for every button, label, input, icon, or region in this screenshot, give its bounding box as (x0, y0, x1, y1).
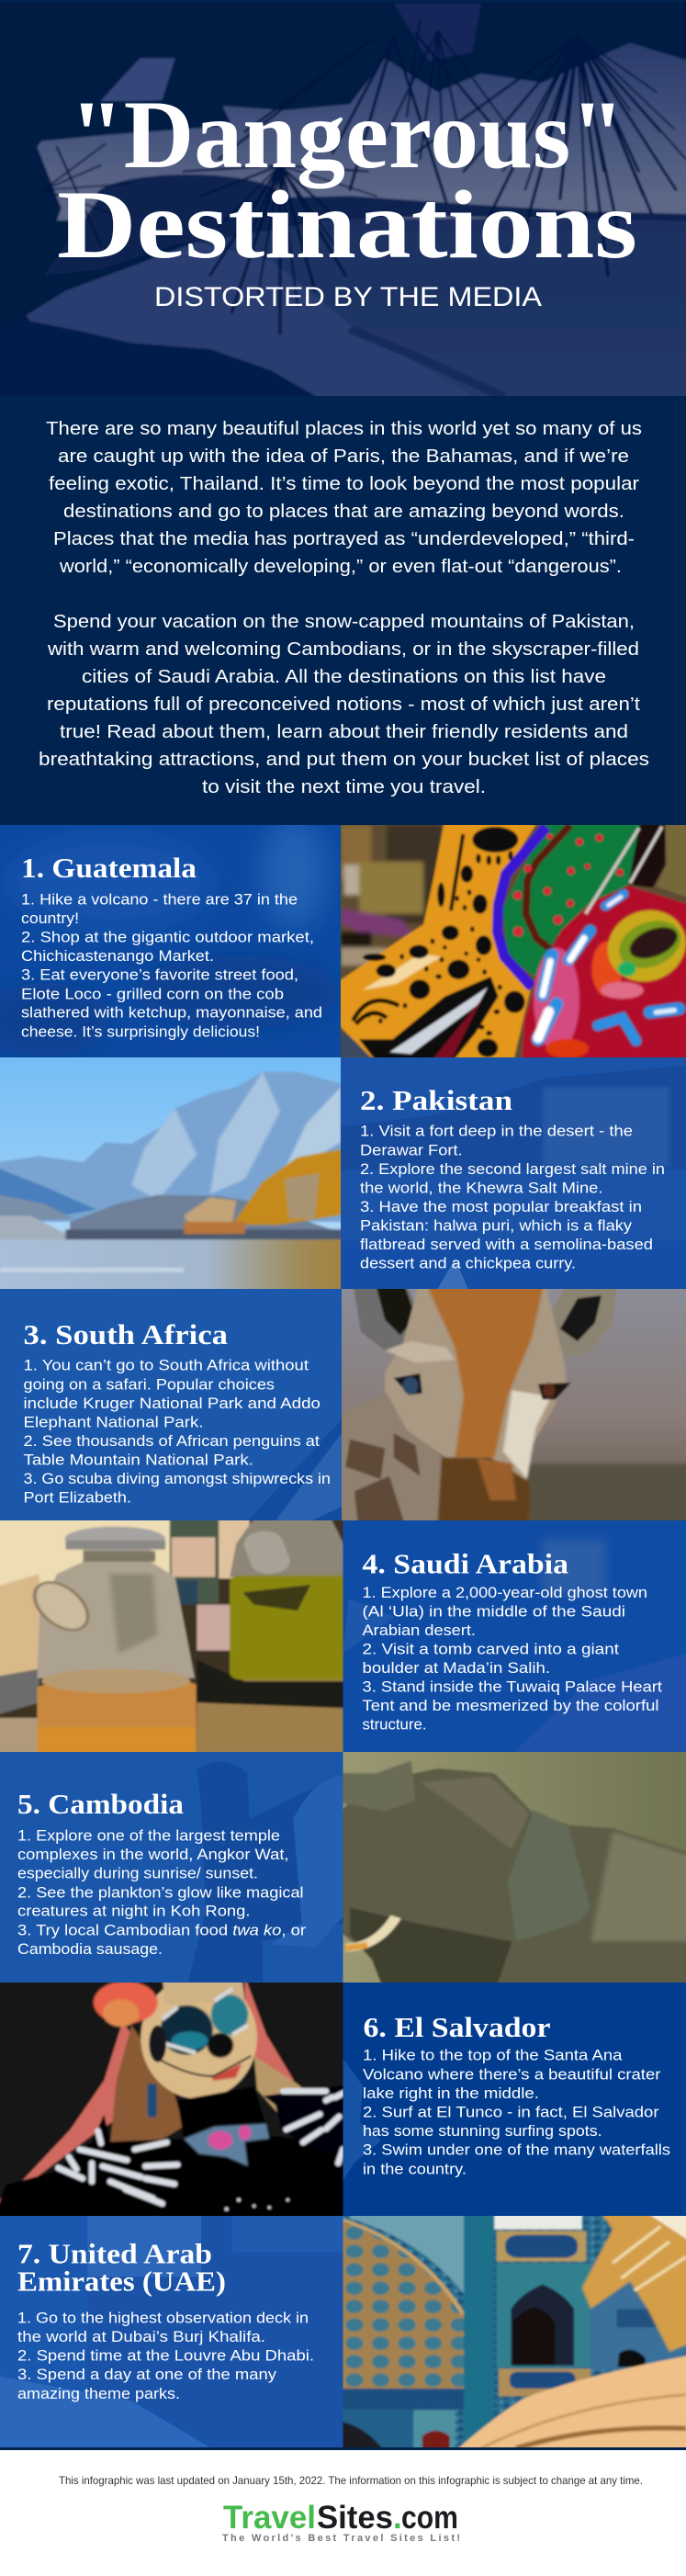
list of activities: 1. Explore a 2,000-year-old ghost town (362, 1584, 647, 1601)
list of activities: 3. Go scuba diving amongst shipwrecks in (24, 1470, 331, 1487)
list of activities: slathered with ketchup, mayonnaise, and (21, 1004, 322, 1022)
panel: introduction (0, 396, 686, 825)
logo: TravelSites.com: com (401, 2500, 458, 2536)
list of activities: 2. Shop at the gigantic outdoor market, (21, 929, 314, 946)
header photo: palm silhouettes over beach (0, 0, 686, 413)
intro paragraph 2: to visit the next time you travel. (202, 776, 486, 797)
tagline: The World's Best Travel Sites List! (222, 2533, 460, 2544)
list of activities: 3. Swim under one of the many waterfalls (363, 2141, 670, 2159)
list of activities (24, 1357, 331, 1507)
photo: giraffe (342, 1289, 686, 1520)
logo: TravelSites.com: Travel (223, 2500, 316, 2536)
heading: 7. United Arab (17, 2237, 212, 2269)
list of activities: 1. Explore one of the largest temple (17, 1826, 280, 1844)
list of activities: 2. Visit a tomb carved into a giant (362, 1641, 619, 1658)
panel: header (0, 0, 686, 413)
list of activities: the world, the Khewra Salt Mine. (360, 1179, 602, 1196)
panel: 3. South Africa (0, 1280, 686, 1531)
logo: TravelSites.com: . (393, 2500, 402, 2536)
panel: 1. Guatemala (0, 813, 686, 1070)
heading: 6. El Salvador (364, 2011, 551, 2043)
intro paragraph 2: with warm and welcoming Cambodians, or in the skyscraper-filled (47, 638, 639, 660)
title (57, 81, 637, 278)
intro paragraph 1: feeling exotic, Thailand. It’s time to look beyond the most popular (49, 473, 639, 494)
heading: 4. Saudi Arabia (362, 1548, 569, 1580)
list of activities: the world at Dubai’s Burj Khalifa. (17, 2328, 265, 2345)
panel: 2. Pakistan (0, 1050, 686, 1298)
list of activities: include Kruger National Park and Addo (24, 1395, 321, 1412)
list of activities (17, 1826, 306, 1958)
intro paragraph 2: breathtaking attractions, and put them on your bucket list of places (39, 749, 649, 770)
heading (17, 2237, 226, 2297)
list of activities: Derawar Fort. (360, 1141, 463, 1158)
list of activities: Arabian desert. (362, 1621, 476, 1639)
list of activities: Elote Loco - grilled corn on the cob (21, 985, 284, 1002)
list of activities: especially during sunrise/ sunset. (17, 1865, 258, 1882)
panel: 7. United Arab Emirates (0, 2205, 686, 2459)
list of activities: Cambodia sausage. (17, 1940, 163, 1958)
intro paragraph 2 (39, 611, 649, 797)
list of activities: 2. Surf at El Tunco - in fact, El Salvador (363, 2103, 659, 2120)
list of activities: 3. Eat everyone’s favorite street food, (21, 966, 298, 984)
list of activities: Port Elizabeth. (24, 1489, 131, 1507)
list of activities: (Al ‘Ula) in the middle of the Saudi (362, 1603, 625, 1621)
list of activities: has some stunning surfing spots. (363, 2122, 602, 2140)
heading: 1. Guatemala (21, 852, 197, 884)
intro paragraph 2: cities of Saudi Arabia. All the destinations on this list have (82, 666, 606, 687)
list of activities: country! (21, 910, 79, 927)
list of activities: complexes in the world, Angkor Wat, (17, 1846, 288, 1863)
list of activities: 1. You can’t go to South Africa without (24, 1357, 309, 1374)
heading: 5. Cambodia (17, 1788, 185, 1820)
intro paragraph 2: true! Read about them, learn about their friendly residents and (60, 721, 628, 742)
photo: woman in sugar-skull makeup (0, 1983, 343, 2216)
subtitle: DISTORTED BY THE MEDIA (154, 282, 542, 312)
photo: lake and mountains (0, 1057, 341, 1289)
list of activities: structure. (362, 1716, 426, 1734)
photo: tiled mosque facade (343, 2216, 686, 2447)
text background (343, 1983, 686, 2216)
list of activities: flatbread served with a semolina-based (360, 1236, 653, 1253)
list of activities: boulder at Mada’in Salih. (362, 1659, 550, 1677)
panel: 4. Saudi Arabia (0, 1509, 686, 1764)
list of activities: Pakistan: halwa puri, which is a flaky (360, 1217, 633, 1235)
heading: Emirates (UAE) (17, 2265, 226, 2297)
intro paragraph 1: destinations and go to places that are amazing beyond words. (63, 501, 624, 522)
list of activities: Volcano where there’s a beautiful crater (363, 2065, 661, 2083)
list of activities (360, 1123, 665, 1272)
intro paragraph 2: reputations full of preconceived notions - most of which just aren’t (47, 694, 640, 715)
title: Destinations (57, 171, 637, 278)
list of activities: lake right in the middle. (363, 2085, 539, 2102)
text background (0, 1289, 342, 1520)
list of activities: going on a safari. Popular choices (24, 1375, 275, 1393)
list of activities: 1. Go to the highest observation deck in (17, 2310, 309, 2327)
title: "Dangerous" (70, 81, 624, 188)
text background (343, 1520, 686, 1752)
intro paragraph 1: There are so many beautiful places in this world yet so many of us (46, 418, 642, 439)
text background (0, 818, 341, 1057)
list of activities: 1. Hike a volcano - there are 37 in the (21, 890, 298, 908)
list of activities: cheese. It’s surprisingly delicious! (21, 1022, 260, 1040)
text background (341, 1057, 686, 1293)
text background (0, 2216, 343, 2448)
list of activities: amazing theme parks. (17, 2385, 180, 2402)
update note: This infographic was last updated on January 15th, 2022. The information on this infographic is subject to change at any time. (59, 2474, 643, 2487)
list of activities (17, 2310, 314, 2402)
list of activities: Chichicastenango Market. (21, 947, 214, 965)
logo: TravelSites.com: Sites (317, 2500, 393, 2536)
photo: painted alebrije masks (341, 825, 686, 1057)
photo: elephant (343, 1752, 686, 1983)
intro paragraph 1: world,” “economically developing,” or even flat-out “dangerous”. (59, 556, 622, 577)
heading: 2. Pakistan (360, 1084, 512, 1116)
list of activities: 3. Try local Cambodian food twa ko, or (17, 1921, 306, 1938)
list of activities (21, 890, 322, 1040)
intro paragraph 1: Places that the media has portrayed as “underdeveloped,” “third- (53, 528, 635, 549)
panel: 6. El Salvador (0, 1983, 686, 2216)
list of activities: Table Mountain National Park. (24, 1451, 253, 1468)
list of activities: creatures at night in Koh Rong. (17, 1903, 250, 1920)
heading: 3. South Africa (24, 1318, 229, 1350)
list of activities: 2. See the plankton’s glow like magical (17, 1883, 304, 1901)
list of activities: in the country. (363, 2160, 467, 2177)
logo: TravelSites.com (223, 2500, 458, 2536)
list of activities: Elephant National Park. (24, 1413, 204, 1430)
list of activities: dessert and a chickpea curry. (360, 1255, 576, 1272)
intro paragraph 1 (46, 418, 642, 577)
list of activities: 2. See thousands of African penguins at (24, 1432, 320, 1450)
panel: 5. Cambodia (0, 1743, 686, 1994)
list of activities: Tent and be mesmerized by the colorful (362, 1697, 659, 1714)
list of activities: 2. Explore the second largest salt mine in (360, 1160, 665, 1178)
list of activities: 1. Hike to the top of the Santa Ana (363, 2047, 623, 2064)
list of activities: 1. Visit a fort deep in the desert - the (360, 1123, 633, 1140)
list of activities: 3. Stand inside the Tuwaiq Palace Heart (362, 1678, 662, 1696)
text background (0, 1752, 343, 1983)
list of activities (362, 1584, 662, 1734)
list of activities: 3. Have the most popular breakfast in (360, 1198, 642, 1215)
list of activities: 2. Spend time at the Louvre Abu Dhabi. (17, 2347, 314, 2365)
intro paragraph 2: Spend your vacation on the snow-capped mountains of Pakistan, (53, 611, 635, 632)
panel: footer (59, 2474, 643, 2544)
list of activities: 3. Spend a day at one of the many (17, 2366, 277, 2383)
photo: glass jars of tea (0, 1520, 343, 1752)
intro paragraph 1: are caught up with the idea of Paris, the Bahamas, and if we’re (58, 446, 629, 467)
list of activities (363, 2047, 670, 2177)
